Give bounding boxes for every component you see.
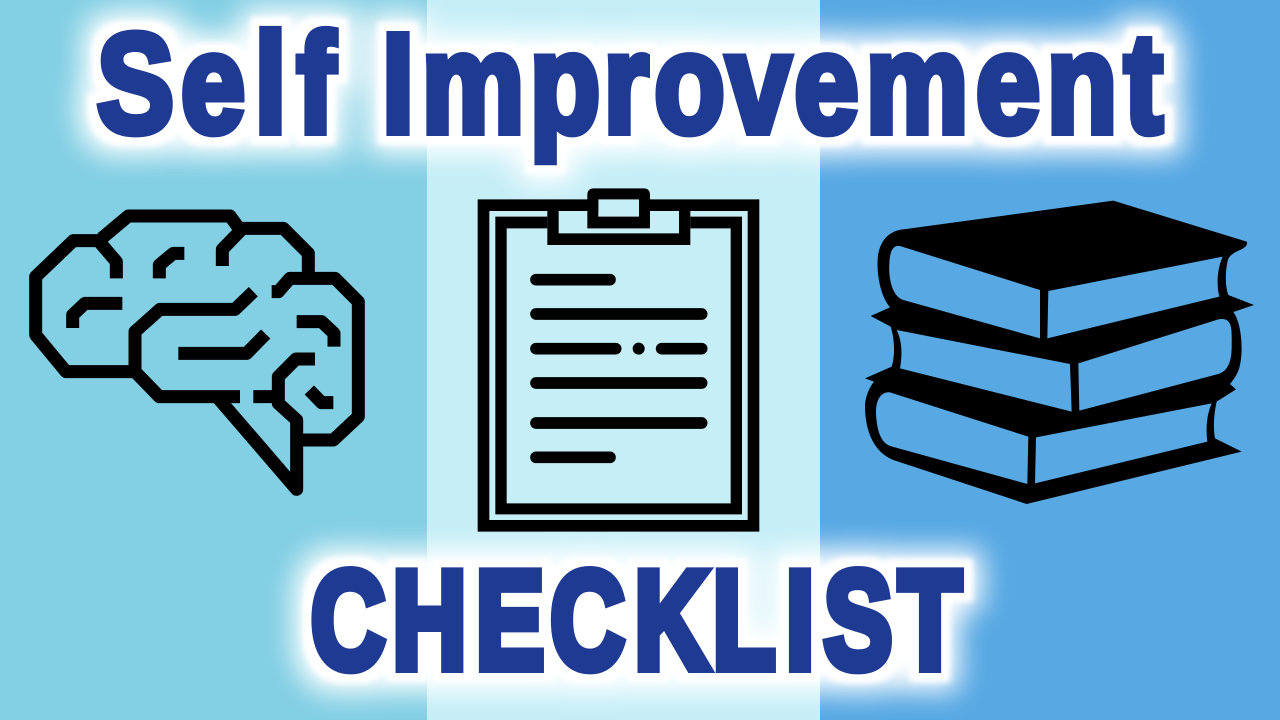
title: CHECKLIST: CHECKLIST: [311, 542, 961, 698]
icon: brain: [36, 216, 358, 489]
panel: right background: [820, 0, 1280, 720]
title: Self Improvement: Self: [97, 5, 336, 163]
icon: clipboard: [478, 188, 759, 532]
icon: stack of books: [865, 201, 1254, 504]
title: Self Improvement: Improvement: [382, 5, 1163, 163]
panel: centre background: [427, 0, 820, 720]
panel: left background: [0, 0, 427, 720]
